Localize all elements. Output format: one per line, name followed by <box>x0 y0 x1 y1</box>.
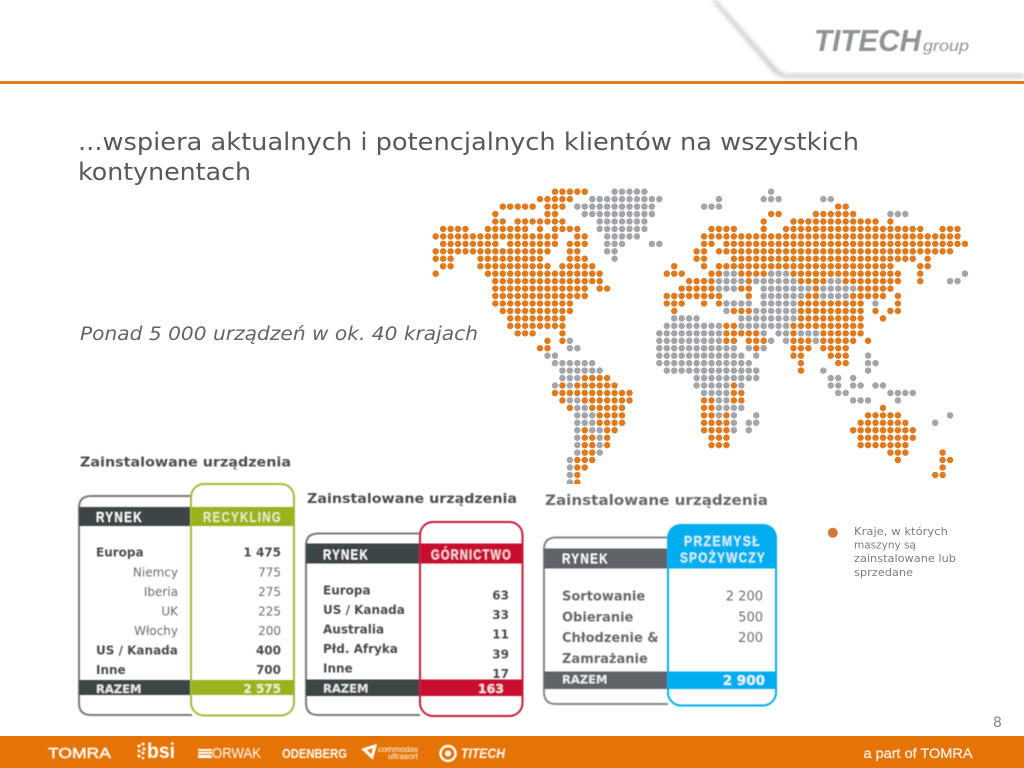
logo: commodas ultrasort: commodas <box>378 744 418 754</box>
logo: TITECH group: TITECH <box>814 23 922 58</box>
rows: Płd. Afryka <box>323 642 398 656</box>
rows: Niemcy <box>133 566 178 580</box>
logo: bsi: bsi <box>147 740 175 763</box>
world dot map <box>436 192 965 482</box>
table: przemysł spożywczy: SPOŻYWCZY <box>680 550 766 566</box>
logo: TITECH <box>440 746 505 761</box>
rows <box>96 546 281 677</box>
table: recykling: 2 575 <box>243 682 281 696</box>
header band <box>79 507 191 526</box>
legend text: zainstalowane lub <box>854 552 956 565</box>
outer frame <box>79 496 192 715</box>
rows: 200 <box>258 624 281 638</box>
rows: 775 <box>258 566 281 580</box>
rows: Australia <box>323 622 384 636</box>
footer band <box>544 672 668 689</box>
logo: TITECH: TITECH <box>461 746 505 761</box>
logo: commodas ultrasort: ultrasort <box>388 751 419 761</box>
rows: Chłodzenie & <box>562 631 659 646</box>
total row: RAZEM <box>323 682 368 696</box>
header swoosh <box>712 0 1024 78</box>
highlight column <box>191 484 294 716</box>
legend text: maszyny są <box>854 538 916 552</box>
title: kontynentach <box>78 158 251 186</box>
tagline: a part of TOMRA: a part of TOMRA <box>864 745 973 761</box>
rows: Europa <box>323 584 371 598</box>
rows: 2 200 <box>726 590 763 604</box>
rows <box>562 590 763 667</box>
rows: Europa <box>96 546 144 560</box>
footer band <box>306 680 420 696</box>
table: recykling <box>79 454 294 716</box>
legend text <box>854 525 956 579</box>
page number: 8 <box>993 715 1002 731</box>
rows: 400 <box>256 644 281 658</box>
footer band <box>0 736 1024 768</box>
table: recykling: RECYKLING <box>203 510 282 526</box>
highlight header fill <box>668 525 776 568</box>
table: przemysł spożywczy: PRZEMYSŁ <box>684 534 761 550</box>
rows: 275 <box>258 585 281 599</box>
rows <box>323 584 509 681</box>
footer logos <box>48 740 505 763</box>
legend <box>828 525 956 579</box>
orange header line <box>0 81 1024 84</box>
outer frame <box>306 534 420 715</box>
total row: RAZEM <box>562 672 607 686</box>
table: przemysł spożywczy <box>544 493 776 706</box>
rows: Inne <box>96 663 126 677</box>
rows: 1 475 <box>243 546 281 560</box>
logo: TOMRA: TOMRA <box>48 746 111 762</box>
outer frame <box>544 538 668 704</box>
rows: Iberia <box>144 585 178 599</box>
column headers: RYNEK <box>323 548 369 564</box>
rows: 700 <box>256 663 281 677</box>
legend text: Kraje, w których <box>854 525 948 538</box>
table: górnictwo: GÓRNICTWO <box>431 546 512 564</box>
rows: 500 <box>738 610 763 626</box>
rows: Zamrażanie <box>562 652 648 667</box>
rows: 17 <box>492 667 509 681</box>
highlight column <box>420 522 522 716</box>
rows: 63 <box>492 588 509 602</box>
header band <box>306 544 420 564</box>
rows: 11 <box>492 628 509 642</box>
logo: ORWAK: ORWAK <box>212 746 261 762</box>
orange dots <box>436 192 965 482</box>
rows: 200 <box>738 631 763 646</box>
table: górnictwo: 163 <box>478 681 504 696</box>
table heading: Zainstalowane urządzenia <box>80 454 291 470</box>
table heading: Zainstalowane urządzenia <box>545 493 768 509</box>
rows: 33 <box>492 608 509 622</box>
column headers: RYNEK <box>96 510 143 526</box>
title <box>78 128 859 186</box>
header band <box>544 548 668 568</box>
highlight column <box>668 525 776 706</box>
logo: TITECH group: group <box>923 38 969 55</box>
table: przemysł spożywczy: 2 900 <box>723 673 765 689</box>
subtitle: Ponad 5 000 urządzeń w ok. 40 krajach <box>80 324 478 345</box>
rows: US / Kanada <box>96 644 178 658</box>
footer band <box>79 680 191 695</box>
rows: UK <box>161 604 179 618</box>
table: górnictwo <box>306 491 523 716</box>
rows: Włochy <box>134 624 178 638</box>
column headers: RYNEK <box>562 552 609 568</box>
rows: Obieranie <box>562 610 634 626</box>
rows: Sortowanie <box>562 590 645 604</box>
rows: 225 <box>258 604 281 618</box>
title: ...wspiera aktualnych i potencjalnych klientów na wszystkich <box>78 128 859 156</box>
rows: Inne <box>323 662 353 676</box>
table heading: Zainstalowane urządzenia <box>307 491 517 507</box>
gray dots <box>547 192 965 482</box>
legend marker <box>828 528 838 538</box>
total row: RAZEM <box>96 682 141 696</box>
legend text: sprzedane <box>854 566 913 579</box>
rows: US / Kanada <box>323 603 405 617</box>
logo: ODENBERG: ODENBERG <box>282 746 347 761</box>
logo: commodas ultrasort <box>364 744 419 761</box>
rows: 39 <box>492 648 509 662</box>
